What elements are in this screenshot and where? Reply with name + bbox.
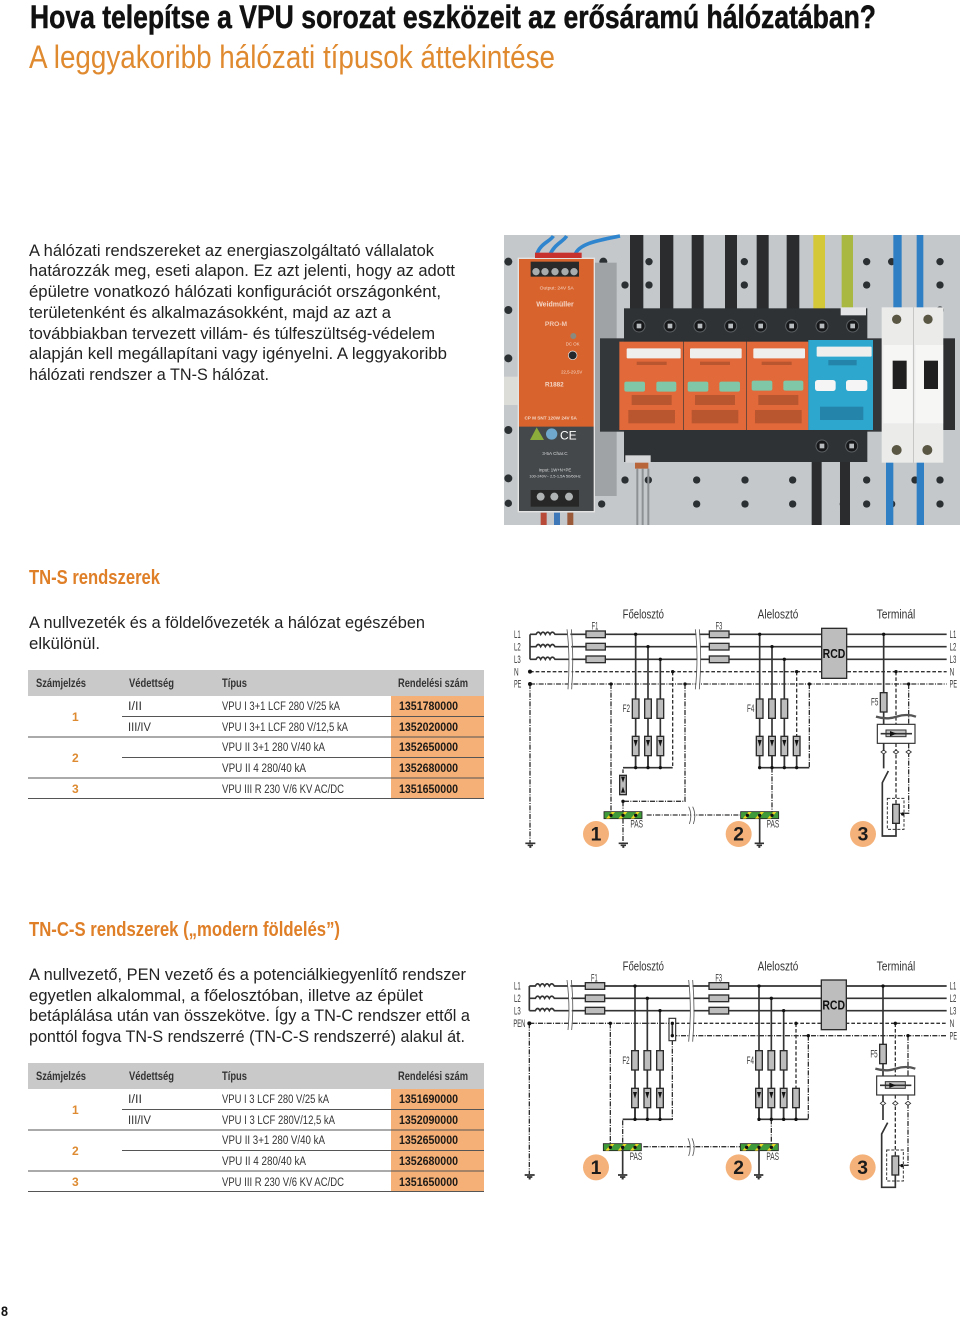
numbered marker 3: 3 — [857, 1158, 868, 1179]
diagram labels — [514, 606, 957, 831]
intro text block: A hálózati rendszereket az energiaszolgáltató vállalatok — [29, 242, 435, 260]
diagram labels: PAS — [766, 1151, 779, 1163]
numbered marker 2 — [726, 821, 752, 847]
intro text block: alapján kell megállapítani vagy igényelni. A leggyakoribb — [29, 345, 447, 363]
table: TN-S products: VPU I 3+1 LCF 280 V/12,5 kA — [222, 722, 348, 734]
table: TN-C-S products: I/II — [128, 1094, 142, 1106]
diagram labels: Terminál — [877, 606, 915, 621]
circuit breakers — [882, 307, 955, 463]
surge arresters — [620, 736, 800, 795]
PEN split terminal — [669, 1018, 676, 1041]
junction dots — [527, 984, 910, 1167]
table: TN-S products: 1352020000 — [399, 720, 458, 734]
heading: TN-S: TN-S rendszerek — [29, 567, 161, 589]
power supply — [518, 253, 617, 525]
table: TN-S products: 1 — [72, 710, 79, 724]
table: TN-C-S products: 1352090000 — [399, 1113, 458, 1127]
ground symbols — [525, 843, 764, 847]
diagram labels: F3 — [715, 972, 722, 984]
potential bars PAS — [604, 812, 779, 843]
surge protector base — [600, 307, 883, 463]
table: TN-S products: 1351650000 — [399, 782, 458, 796]
diagram labels: Főelosztó — [623, 958, 664, 973]
table: TN-C-S products: Védettség — [129, 1071, 174, 1083]
diagram labels: L3 — [514, 654, 521, 666]
table: TN-S products: Típus — [222, 678, 247, 690]
heading: TN-C-S: TN-C-S rendszerek („modern földelés”) — [29, 919, 340, 941]
diagram labels: Alelosztó — [758, 606, 798, 621]
TN-C-S description: ponttól fogva TN-S rendszerré (TN-C-S rendszerré) alakul át. — [29, 1028, 465, 1046]
numbered marker 1: 1 — [591, 825, 602, 846]
power supply: 3-5A Char.C — [542, 451, 568, 456]
potential bars PAS — [603, 1144, 778, 1174]
diagram: TN-C-S wiring — [513, 958, 957, 1187]
table: TN-S products: I/II — [128, 701, 142, 713]
orange and blue modules — [619, 340, 873, 430]
power supply: Weidmüller — [536, 302, 574, 309]
table: TN-S products: 2 — [72, 751, 79, 765]
surge arresters — [632, 1088, 799, 1108]
TN-C-S description: betáplálása után van összekötve. Így a TN-C rendszer ettől a — [29, 1006, 471, 1025]
numbered marker 2: 2 — [733, 1158, 744, 1179]
junction dots — [528, 633, 910, 817]
numbered marker 1 — [583, 821, 609, 847]
numbered marker 2: 2 — [733, 825, 744, 846]
diagram: TN-S wiring — [514, 606, 957, 847]
diagram labels: F2 — [623, 703, 630, 715]
RCD box: RCD — [822, 999, 845, 1013]
earth and neutral wires — [537, 235, 924, 525]
numbered marker 3 — [850, 821, 876, 847]
terminal device — [876, 715, 916, 829]
power supply: PRO-M — [545, 321, 568, 328]
table: TN-C-S products: 1352650000 — [399, 1133, 458, 1147]
intro text block — [29, 242, 455, 384]
RCD box — [822, 628, 847, 678]
TN-S description — [29, 614, 425, 653]
TN-C-S description: egyetlen alkalommal, a főelosztóban, illetve az épület — [29, 987, 423, 1005]
diagram labels: L2 — [514, 641, 521, 653]
power supply: R1882 — [545, 382, 564, 389]
table: TN-C-S products: 1351690000 — [399, 1092, 458, 1106]
intro text block: továbbiakban tervezett villám- és túlfeszültség-védelem — [29, 325, 435, 343]
diagram labels: N — [950, 666, 954, 678]
diagram labels: PAS — [630, 1151, 642, 1163]
diagram labels: F2 — [622, 1055, 630, 1067]
RCD box: RCD — [823, 647, 845, 661]
diagram labels: L1 — [514, 981, 521, 993]
fuses F2 F4 F5 — [632, 693, 887, 718]
table: TN-S products: 1352650000 — [399, 740, 458, 754]
table: TN-S products: 1351780000 — [399, 699, 458, 713]
fuses F2 F4 F5 — [632, 1044, 886, 1070]
table: TN-C-S products: Típus — [222, 1071, 247, 1083]
diagram labels: Alelosztó — [758, 958, 798, 973]
diagram labels: L1 — [514, 629, 521, 641]
photo: surge protection devices on a perforated panel — [504, 235, 960, 525]
diagram labels — [513, 958, 957, 1163]
table: TN-S products: 1352680000 — [399, 761, 458, 775]
table: TN-C-S products: 3 — [72, 1175, 79, 1189]
power supply: Output: 24V 5A — [540, 285, 574, 291]
numbered marker 1 — [583, 1154, 609, 1180]
diagram labels: PEN — [513, 1018, 525, 1030]
DIN rail — [504, 377, 518, 405]
power supply: 22,5-29,5V — [561, 369, 582, 374]
table: TN-C-S products: VPU I 3 LCF 280V/12,5 kA — [222, 1115, 335, 1127]
diagram labels: F5 — [870, 1048, 878, 1060]
power supply: CP M SNT 120W 24V 5A — [524, 415, 578, 420]
power supply: 100-240V~ 2,5-1,5A 50/60Hz — [529, 474, 581, 479]
TN-C-S description: A nullvezető, PEN vezető és a potenciálkiegyenlítő rendszer — [29, 966, 466, 984]
intro text block: hálózati rendszer a TN-S hálózat. — [29, 366, 269, 384]
diagram labels: F5 — [871, 696, 878, 708]
table: TN-C-S products: 1 — [72, 1103, 79, 1117]
diagram labels: F1 — [592, 621, 598, 633]
table: TN-C-S products: 2 — [72, 1144, 79, 1158]
TN-C-S description — [29, 966, 471, 1046]
panel holes — [504, 258, 944, 508]
table: TN-C-S products: III/IV — [128, 1115, 151, 1127]
table: TN-C-S products: VPU III R 230 V/6 KV AC/DC — [222, 1177, 344, 1189]
numbered marker 2 — [726, 1154, 752, 1180]
table: TN-C-S products: Számjelzés — [36, 1071, 86, 1083]
table: TN-C-S products: VPU II 3+1 280 V/40 kA — [222, 1135, 325, 1147]
table: TN-S products: Számjelzés — [36, 678, 86, 690]
RCD box — [821, 980, 846, 1030]
ground symbols — [525, 1175, 763, 1179]
fuses F1 and F3 — [585, 983, 729, 1014]
table: TN-S products: Védettség — [129, 678, 174, 690]
intro text block: határozzák meg, eseti alapon. Ez azt jelenti, hogy az adott — [29, 262, 455, 280]
subtitle: A leggyakoribb hálózati típusok áttekintése — [29, 39, 555, 75]
table: TN-C-S products: 1352680000 — [399, 1154, 458, 1168]
numbered marker 1: 1 — [591, 1158, 602, 1179]
TN-S description: A nullvezeték és a földelővezeték a hálózat egészében — [29, 614, 425, 632]
table: TN-S products: VPU II 3+1 280 V/40 kA — [222, 742, 325, 754]
table: TN-C-S products — [28, 1063, 484, 1192]
diagram labels: F4 — [747, 1055, 754, 1067]
diagram labels: F3 — [716, 621, 722, 633]
table: TN-S products: 3 — [72, 782, 79, 796]
diagram labels: PE — [514, 679, 521, 691]
diagram labels: Terminál — [877, 958, 915, 973]
table: TN-C-S products: VPU II 4 280/40 kA — [222, 1156, 306, 1168]
diagram labels: L3 — [514, 1005, 521, 1017]
numbered marker 3 — [850, 1154, 876, 1180]
table: TN-S products: VPU II 4 280/40 kA — [222, 763, 306, 775]
intro text block: területenként és alkalmazásokként, majd az azt a — [29, 304, 392, 322]
table: TN-C-S products: Rendelési szám — [398, 1071, 468, 1083]
table: TN-C-S products: VPU I 3 LCF 280 V/25 kA — [222, 1094, 329, 1106]
diagram labels: Főelosztó — [623, 606, 664, 621]
terminal device — [875, 1067, 915, 1181]
diagram labels: F1 — [591, 972, 598, 984]
table: TN-S products — [28, 670, 484, 798]
diagram labels: PAS — [767, 819, 779, 831]
table: TN-S products: III/IV — [128, 722, 151, 734]
numbered marker 3: 3 — [858, 825, 869, 846]
intro text block: épületre vonatkozó hálózati konfigurációt országonként, — [29, 283, 441, 301]
diagram labels: F4 — [747, 703, 754, 715]
diagram labels: PAS — [630, 819, 643, 831]
table: TN-C-S products: 1351650000 — [399, 1175, 458, 1189]
power supply: CE — [560, 428, 577, 442]
black cables — [630, 235, 850, 525]
table: TN-S products: VPU III R 230 V/6 KV AC/DC — [222, 784, 344, 796]
TN-S description: elkülönül. — [29, 635, 100, 653]
fuses F1 and F3 — [586, 631, 729, 663]
diagram labels: N — [514, 666, 519, 678]
power supply: DC OK — [566, 342, 580, 347]
table: TN-S products: Rendelési szám — [398, 678, 468, 690]
power supply: Input: 1W+N+PE — [539, 468, 571, 473]
diagram labels: N — [950, 1018, 954, 1030]
diagram labels: L2 — [514, 993, 521, 1005]
table: TN-S products: VPU I 3+1 LCF 280 V/25 kA — [222, 701, 340, 713]
